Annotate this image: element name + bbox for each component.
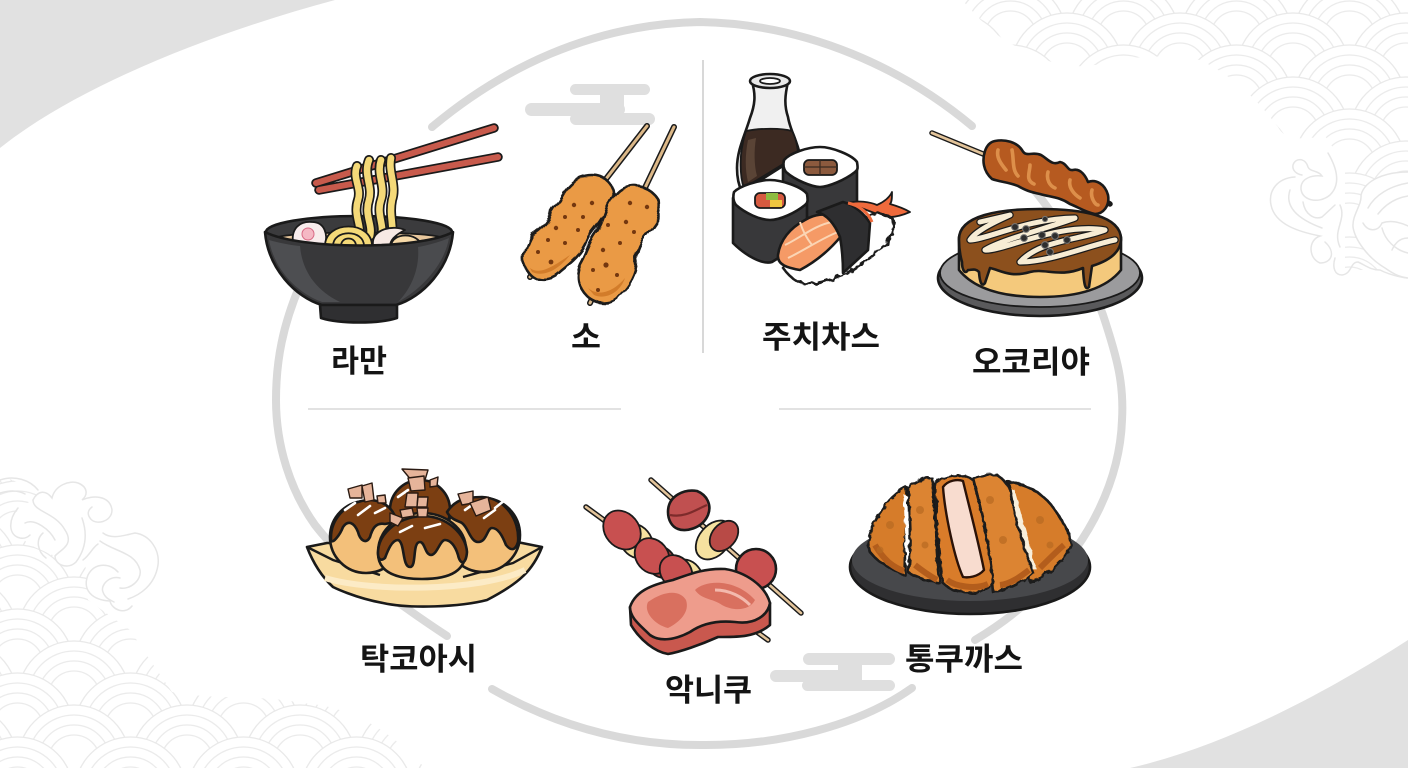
vertical divider (702, 60, 704, 353)
cloud ornament top (525, 84, 655, 125)
cloud ornament bottom (770, 653, 895, 691)
icon: takoyaki boat (307, 469, 542, 607)
icon: fried skewers (524, 126, 674, 303)
label: sushi: 주치차스 (762, 320, 880, 355)
label: anticuchos: 악니쿠 (665, 673, 752, 708)
panel: anticuchos (586, 480, 801, 708)
icon: ramen bowl (265, 128, 498, 322)
panel: tonkatsu (850, 474, 1090, 677)
large circle ring segments (276, 22, 1122, 745)
panel: skewers (524, 126, 674, 355)
panel: takoyaki (307, 469, 542, 677)
horizontal divider right (779, 408, 1091, 410)
panel: sushi (733, 74, 910, 355)
background: grey corner bottom-right (1130, 640, 1408, 768)
wave pattern bottom-left (0, 475, 425, 768)
panel: okonomiyaki (932, 133, 1142, 380)
swirl ornament left 1 (0, 478, 112, 566)
wave pattern top-right (962, 0, 1408, 278)
icon: tonkatsu on plate (850, 474, 1090, 614)
swirl ornament left 2 (83, 533, 158, 611)
horizontal divider left (308, 408, 621, 410)
icon: sushi with soy bottle (733, 74, 910, 283)
swirl ornament right 1 (1270, 153, 1407, 278)
swirl ornament right 2 (1353, 172, 1408, 278)
icon: meat skewers and steak (586, 480, 801, 654)
label: tonkatsu: 통쿠까스 (905, 642, 1023, 677)
label: okonomiyaki: 오코리야 (972, 345, 1090, 380)
icon: okonomiyaki with skewer (932, 133, 1142, 316)
background: grey corner top-left (0, 0, 335, 148)
panel: ramen (265, 128, 498, 379)
label: ramen: 라만 (331, 344, 387, 379)
label: takoyaki: 탁코아시 (360, 642, 477, 677)
label: skewers: 소 (571, 320, 601, 355)
